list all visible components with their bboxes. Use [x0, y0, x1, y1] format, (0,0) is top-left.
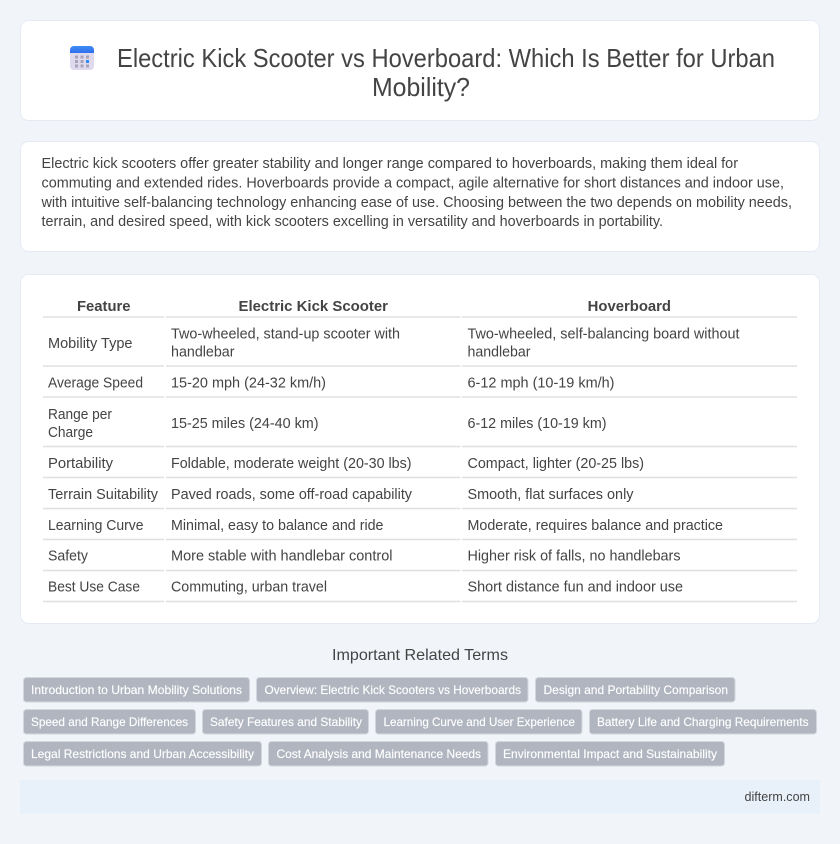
row: range per charge: [43, 407, 797, 446]
table header: Feature: [77, 299, 130, 315]
row: portability: Portability: [48, 456, 114, 472]
row: best use case: [43, 580, 797, 602]
table header: Electric Kick Scooter: [238, 299, 388, 315]
tag: Design and Portability Comparison: [544, 683, 728, 697]
row: mobility type: [43, 326, 797, 366]
tag: Battery Life and Charging Requirements: [597, 715, 808, 729]
row: learning curve: Minimal, easy to balance and ride: [171, 518, 384, 534]
row: average speed: 6-12 mph (10-19 km/h): [468, 376, 614, 392]
row: safety: Safety: [48, 549, 89, 565]
footer bar: [20, 780, 820, 814]
footer bar: difterm.com: [744, 789, 810, 804]
icon: calendar: [70, 46, 94, 70]
row: mobility type: Two-wheeled, self-balancing board without: [468, 326, 740, 342]
row: learning curve: [43, 518, 797, 540]
row: safety: [43, 549, 797, 570]
row: mobility type: Two-wheeled, stand-up scooter with: [171, 326, 400, 342]
row: best use case: Short distance fun and indoor use: [468, 580, 683, 596]
row: learning curve: Moderate, requires balance and practice: [468, 518, 723, 534]
tag: [376, 710, 582, 734]
table header: [43, 299, 797, 317]
tag: Environmental Impact and Sustainability: [503, 747, 717, 761]
tag: Legal Restrictions and Urban Accessibility: [31, 747, 254, 761]
row: best use case: Commuting, urban travel: [171, 580, 327, 596]
tag: [24, 742, 262, 766]
tag: [202, 710, 368, 734]
row: terrain suitability: Paved roads, some off-road capability: [171, 487, 413, 503]
row: portability: Foldable, moderate weight (20-30 lbs): [171, 456, 412, 472]
panel: page title: [20, 20, 820, 120]
row: average speed: [43, 376, 797, 397]
title: [117, 45, 775, 102]
panel: summary text: Electric kick scooters offer greater stability and longer range compared to hoverboards, making them ideal for: [42, 156, 738, 172]
title: Mobility?: [372, 74, 470, 102]
panel: comparison table: [20, 274, 820, 624]
tag: [590, 710, 816, 734]
tag: [256, 678, 528, 702]
row: range per charge: Charge: [48, 425, 93, 441]
row: best use case: Best Use Case: [48, 580, 140, 596]
row: average speed: 15-20 mph (24-32 km/h): [171, 376, 326, 392]
tag: Learning Curve and User Experience: [384, 715, 575, 729]
tag: Introduction to Urban Mobility Solutions: [31, 683, 242, 697]
related terms tags: [24, 678, 816, 766]
row: terrain suitability: Smooth, flat surfaces only: [468, 487, 634, 503]
row: safety: Higher risk of falls, no handlebars: [468, 549, 680, 565]
tag: [496, 742, 724, 766]
tag: Cost Analysis and Maintenance Needs: [276, 747, 481, 761]
panel: summary text: [20, 142, 820, 252]
tag: Overview: Electric Kick Scooters vs Hoverboards: [264, 683, 521, 697]
tag: [536, 678, 735, 702]
row: mobility type: handlebar: [171, 345, 235, 361]
title: Electric Kick Scooter vs Hoverboard: Which Is Better for Urban: [117, 45, 775, 73]
row: terrain suitability: [43, 487, 797, 508]
row: average speed: Average Speed: [48, 376, 143, 392]
row: learning curve: Learning Curve: [48, 518, 144, 534]
row: range per charge: Range per: [48, 407, 112, 423]
row: mobility type: Mobility Type: [48, 336, 132, 352]
tag: [268, 742, 488, 766]
tag: [24, 678, 250, 702]
tag: Safety Features and Stability: [210, 715, 362, 729]
panel: summary text: terrain, and desired speed, with kick scooters excelling in versatility and hoverboards in portability.: [42, 214, 663, 230]
row: mobility type: handlebar: [468, 345, 531, 361]
heading: related terms: Important Related Terms: [332, 647, 508, 664]
tag: Speed and Range Differences: [31, 715, 188, 729]
row: portability: Compact, lighter (20-25 lbs): [468, 456, 644, 472]
panel: summary text: with intuitive self-balancing technology enhancing ease of use. Choosing between the two depends on mobility needs,: [40, 195, 792, 211]
panel: summary text: commuting and extended rides. Hoverboards provide a compact, agile alternative for short distances and indoor use,: [42, 176, 784, 192]
row: safety: More stable with handlebar control: [171, 549, 392, 565]
row: range per charge: 6-12 miles (10-19 km): [468, 416, 606, 432]
table header: Hoverboard: [588, 299, 671, 315]
row: range per charge: 15-25 miles (24-40 km): [171, 416, 318, 432]
tag: [24, 710, 196, 734]
row: portability: [43, 456, 797, 478]
row: terrain suitability: Terrain Suitability: [48, 487, 159, 503]
